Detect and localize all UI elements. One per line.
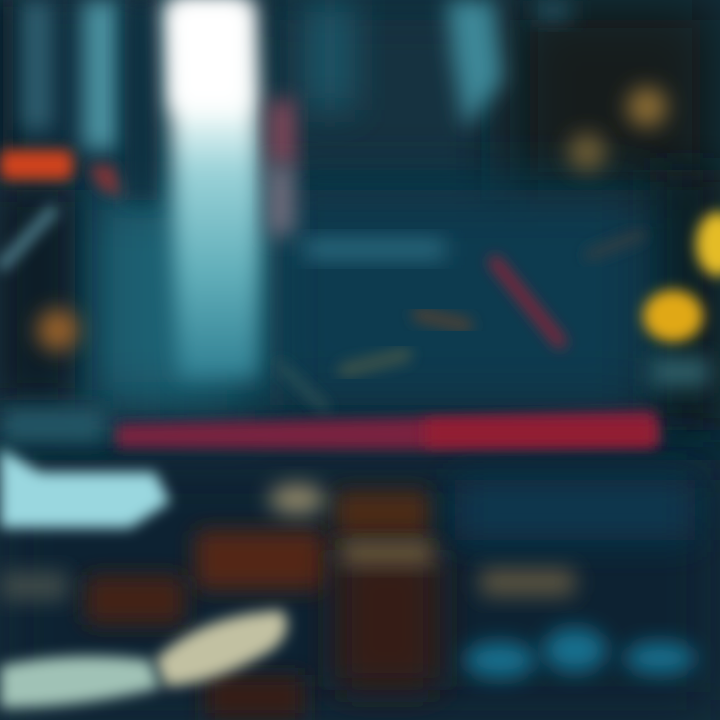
brown stacks <box>0 484 575 720</box>
waterfall <box>165 0 262 378</box>
pale left band <box>0 408 105 442</box>
blue wave text <box>464 628 696 678</box>
glowing lights <box>37 87 720 386</box>
cream coins <box>0 610 287 708</box>
chart label <box>305 240 445 258</box>
panel: left forest columns <box>0 0 571 400</box>
orange banner <box>0 150 122 197</box>
dark blue right panel <box>455 480 695 540</box>
red band <box>115 410 660 450</box>
line chart <box>280 235 640 408</box>
diagonal pale streak <box>0 208 55 268</box>
pink vertical bar <box>268 100 294 235</box>
pale blue wave <box>0 448 170 528</box>
